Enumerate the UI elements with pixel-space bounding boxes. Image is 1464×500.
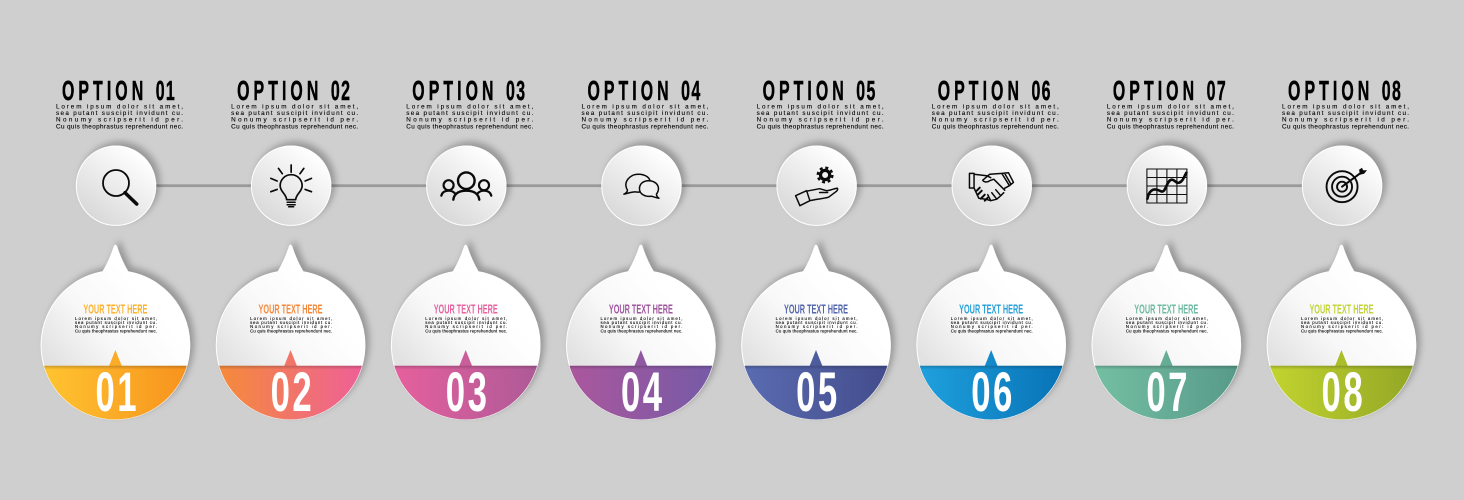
card text: sea putant suscipit invidunt cu. — [951, 320, 1033, 325]
text block: option 03 description: sea putant suscipit invidunt cu. — [406, 110, 534, 117]
icon node: people group — [427, 146, 506, 225]
card text — [75, 316, 157, 333]
number 02: 02 — [271, 361, 314, 423]
heading: option 04: OPTION 04 — [587, 76, 702, 106]
card: option 03 — [391, 245, 540, 419]
card text: Nonumy scripserit id per. — [250, 324, 332, 329]
icon node: magnifier — [76, 146, 156, 225]
number 05: 05 — [796, 361, 840, 423]
text block: option 05 description — [757, 103, 884, 130]
text block: option 08 description: Cu quis theophrastus reprehendunt nec. — [1282, 123, 1409, 130]
card text — [776, 316, 858, 333]
panel: option 08 — [1267, 76, 1416, 423]
card: option 01 — [41, 245, 190, 419]
icon node: handshake — [952, 146, 1031, 225]
card text: Nonumy scripserit id per. — [600, 324, 682, 329]
card text — [425, 316, 507, 333]
panel: option 03 — [391, 76, 540, 423]
number 06: 06 — [971, 361, 1015, 423]
text block: option 02 description — [231, 103, 358, 130]
number 08: 08 — [1322, 361, 1365, 423]
card subtitle: YOUR TEXT HERE — [1134, 302, 1198, 317]
card subtitle: YOUR TEXT HERE — [784, 302, 848, 317]
card: option 02 — [216, 245, 365, 419]
card text: Lorem ipsum dolor sit amet, — [600, 316, 682, 321]
text block: option 01 description: sea putant suscipit invidunt cu. — [56, 110, 183, 117]
text block: option 07 description — [1107, 103, 1234, 130]
icon node: light bulb — [251, 146, 331, 225]
text block: option 03 description: Cu quis theophrastus reprehendunt nec. — [406, 123, 534, 130]
card text: Cu quis theophrastus reprehendunt nec. — [776, 328, 858, 333]
card text: Lorem ipsum dolor sit amet, — [425, 316, 507, 321]
card text — [951, 316, 1033, 333]
card text: Nonumy scripserit id per. — [1126, 324, 1208, 329]
text block: option 04 description — [581, 103, 709, 130]
text block: option 04 description: sea putant suscipit invidunt cu. — [581, 110, 709, 117]
card text: sea putant suscipit invidunt cu. — [1126, 320, 1208, 325]
card text: sea putant suscipit invidunt cu. — [600, 320, 682, 325]
icon node: line chart grid — [1127, 146, 1207, 225]
text block: option 02 description: Cu quis theophrastus reprehendunt nec. — [231, 123, 358, 130]
card text: Cu quis theophrastus reprehendunt nec. — [75, 328, 157, 333]
heading: option 02: OPTION 02 — [237, 76, 351, 106]
text block: option 06 description: sea putant suscipit invidunt cu. — [932, 110, 1059, 117]
number 03: 03 — [446, 361, 489, 423]
card text: Cu quis theophrastus reprehendunt nec. — [425, 328, 507, 333]
number 07: 07 — [1146, 361, 1190, 423]
card text — [600, 316, 682, 333]
card: option 08 — [1267, 245, 1416, 419]
card subtitle: YOUR TEXT HERE — [959, 302, 1023, 317]
text block: option 06 description: Nonumy scripserit id per. — [932, 117, 1059, 124]
panel: option 01 — [41, 76, 190, 423]
text block: option 02 description: Nonumy scripserit id per. — [231, 117, 358, 124]
text block: option 05 description: sea putant suscipit invidunt cu. — [757, 110, 884, 117]
text block: option 08 description: sea putant suscipit invidunt cu. — [1282, 110, 1409, 117]
card text: Lorem ipsum dolor sit amet, — [250, 316, 332, 321]
text block: option 03 description — [406, 103, 534, 130]
heading: option 07: OPTION 07 — [1113, 76, 1227, 106]
text block: option 07 description: Lorem ipsum dolor sit amet, — [1107, 103, 1234, 110]
heading: option 08: OPTION 08 — [1288, 76, 1402, 106]
card text: Cu quis theophrastus reprehendunt nec. — [600, 328, 682, 333]
connector line — [116, 184, 1342, 187]
text block: option 01 description: Nonumy scripserit id per. — [56, 117, 183, 124]
text block: option 06 description: Lorem ipsum dolor sit amet, — [932, 103, 1059, 110]
text block: option 06 description — [932, 103, 1059, 130]
card: option 04 — [567, 245, 715, 419]
card subtitle: YOUR TEXT HERE — [83, 302, 147, 317]
card text: Cu quis theophrastus reprehendunt nec. — [951, 328, 1033, 333]
panel: option 02 — [216, 76, 365, 423]
text block: option 08 description — [1282, 103, 1409, 130]
card text: Nonumy scripserit id per. — [1301, 324, 1383, 329]
card text: sea putant suscipit invidunt cu. — [1301, 320, 1383, 325]
text block: option 08 description: Nonumy scripserit id per. — [1282, 117, 1409, 124]
text block: option 05 description: Lorem ipsum dolor sit amet, — [757, 103, 884, 110]
heading: option 06: OPTION 06 — [938, 76, 1052, 106]
card text: Nonumy scripserit id per. — [951, 324, 1033, 329]
card text: Lorem ipsum dolor sit amet, — [1126, 316, 1208, 321]
number 01: 01 — [96, 361, 139, 423]
text block: option 03 description: Lorem ipsum dolor sit amet, — [406, 103, 534, 110]
text block: option 07 description: Cu quis theophrastus reprehendunt nec. — [1107, 123, 1234, 130]
card subtitle: YOUR TEXT HERE — [1309, 302, 1374, 317]
card text — [250, 316, 332, 333]
card text: Lorem ipsum dolor sit amet, — [951, 316, 1033, 321]
card text: Nonumy scripserit id per. — [425, 324, 507, 329]
text block: option 04 description: Cu quis theophrastus reprehendunt nec. — [581, 123, 709, 130]
icon node: chat bubbles — [602, 146, 681, 225]
panel: option 06 — [917, 76, 1065, 423]
text block: option 07 description: sea putant suscipit invidunt cu. — [1107, 110, 1234, 117]
text block: option 03 description: Nonumy scripserit id per. — [406, 117, 534, 124]
text block: option 02 description: sea putant suscipit invidunt cu. — [231, 110, 358, 117]
panel: option 04 — [567, 76, 715, 423]
text block: option 02 description: Lorem ipsum dolor sit amet, — [231, 103, 358, 110]
card text — [1126, 316, 1208, 333]
icon node: target with arrow — [1302, 146, 1382, 225]
number 04: 04 — [621, 361, 665, 423]
card text: Nonumy scripserit id per. — [75, 324, 157, 329]
card: option 06 — [917, 245, 1065, 419]
card text: Lorem ipsum dolor sit amet, — [75, 316, 157, 321]
card text: Nonumy scripserit id per. — [776, 324, 858, 329]
card subtitle: YOUR TEXT HERE — [434, 302, 498, 317]
text block: option 01 description: Cu quis theophrastus reprehendunt nec. — [56, 123, 183, 130]
card text: sea putant suscipit invidunt cu. — [425, 320, 507, 325]
text block: option 07 description: Nonumy scripserit id per. — [1107, 117, 1234, 124]
text block: option 05 description: Cu quis theophrastus reprehendunt nec. — [757, 123, 884, 130]
card: option 05 — [742, 245, 890, 419]
card text: sea putant suscipit invidunt cu. — [776, 320, 858, 325]
text block: option 04 description: Lorem ipsum dolor sit amet, — [581, 103, 709, 110]
card text — [1301, 316, 1383, 333]
icon node: hand with gear — [777, 146, 856, 225]
card text: sea putant suscipit invidunt cu. — [75, 320, 157, 325]
text block: option 01 description: Lorem ipsum dolor sit amet, — [56, 103, 183, 110]
card subtitle: YOUR TEXT HERE — [609, 302, 673, 317]
heading: option 05: OPTION 05 — [763, 76, 877, 106]
heading: option 01: OPTION 01 — [62, 76, 176, 106]
card: option 07 — [1092, 245, 1241, 419]
heading: option 03: OPTION 03 — [412, 76, 526, 106]
card text: Lorem ipsum dolor sit amet, — [1301, 316, 1383, 321]
card text: Cu quis theophrastus reprehendunt nec. — [1301, 328, 1383, 333]
panel: option 05 — [742, 76, 890, 423]
card text: Cu quis theophrastus reprehendunt nec. — [1126, 328, 1208, 333]
panel: option 07 — [1092, 76, 1241, 423]
text block: option 01 description — [56, 103, 183, 130]
card text: Cu quis theophrastus reprehendunt nec. — [250, 328, 332, 333]
card text: sea putant suscipit invidunt cu. — [250, 320, 332, 325]
text block: option 08 description: Lorem ipsum dolor sit amet, — [1282, 103, 1409, 110]
text block: option 06 description: Cu quis theophrastus reprehendunt nec. — [932, 123, 1059, 130]
card subtitle: YOUR TEXT HERE — [259, 302, 323, 317]
card text: Lorem ipsum dolor sit amet, — [776, 316, 858, 321]
text block: option 04 description: Nonumy scripserit id per. — [581, 117, 709, 124]
text block: option 05 description: Nonumy scripserit id per. — [757, 117, 884, 124]
